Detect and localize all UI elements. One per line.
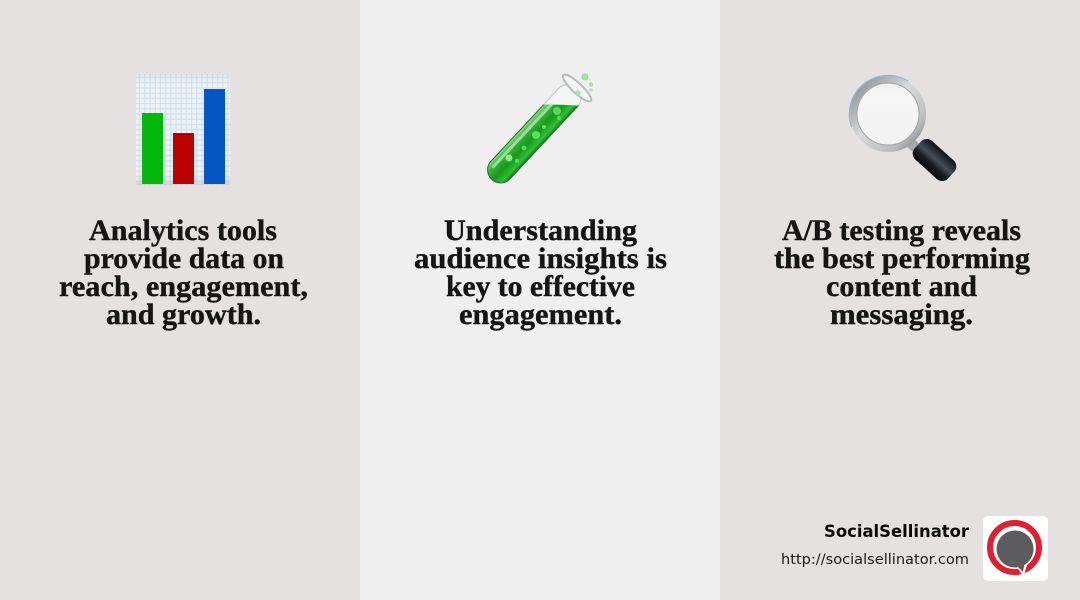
heading: audience insights: key to effective [446, 270, 635, 303]
heading: analytics tools: Analytics tools [89, 214, 277, 247]
heading: audience insights: audience insights is [414, 242, 667, 275]
brand url: http://socialsellinator.com [781, 552, 969, 568]
panel: analytics [0, 0, 360, 600]
heading: A/B testing: the best performing [774, 242, 1030, 275]
heading: analytics tools: and growth. [106, 298, 261, 331]
heading: A/B testing: content and [826, 270, 977, 303]
icon: test tube [487, 74, 594, 184]
brand name: SocialSellinator [824, 522, 970, 541]
heading: A/B testing: A/B testing reveals [782, 214, 1021, 247]
panel: A/B testing [720, 0, 1080, 600]
logo [983, 516, 1048, 581]
icon: magnifying glass [839, 65, 960, 184]
heading: audience insights: Understanding [444, 214, 637, 247]
heading: analytics tools: reach, engagement, [59, 270, 308, 303]
panel: audience insights [360, 0, 720, 600]
heading: audience insights: engagement. [459, 298, 622, 331]
heading: analytics tools: provide data on [84, 242, 284, 275]
heading: A/B testing: messaging. [830, 298, 973, 331]
icon: bar chart [136, 74, 230, 185]
